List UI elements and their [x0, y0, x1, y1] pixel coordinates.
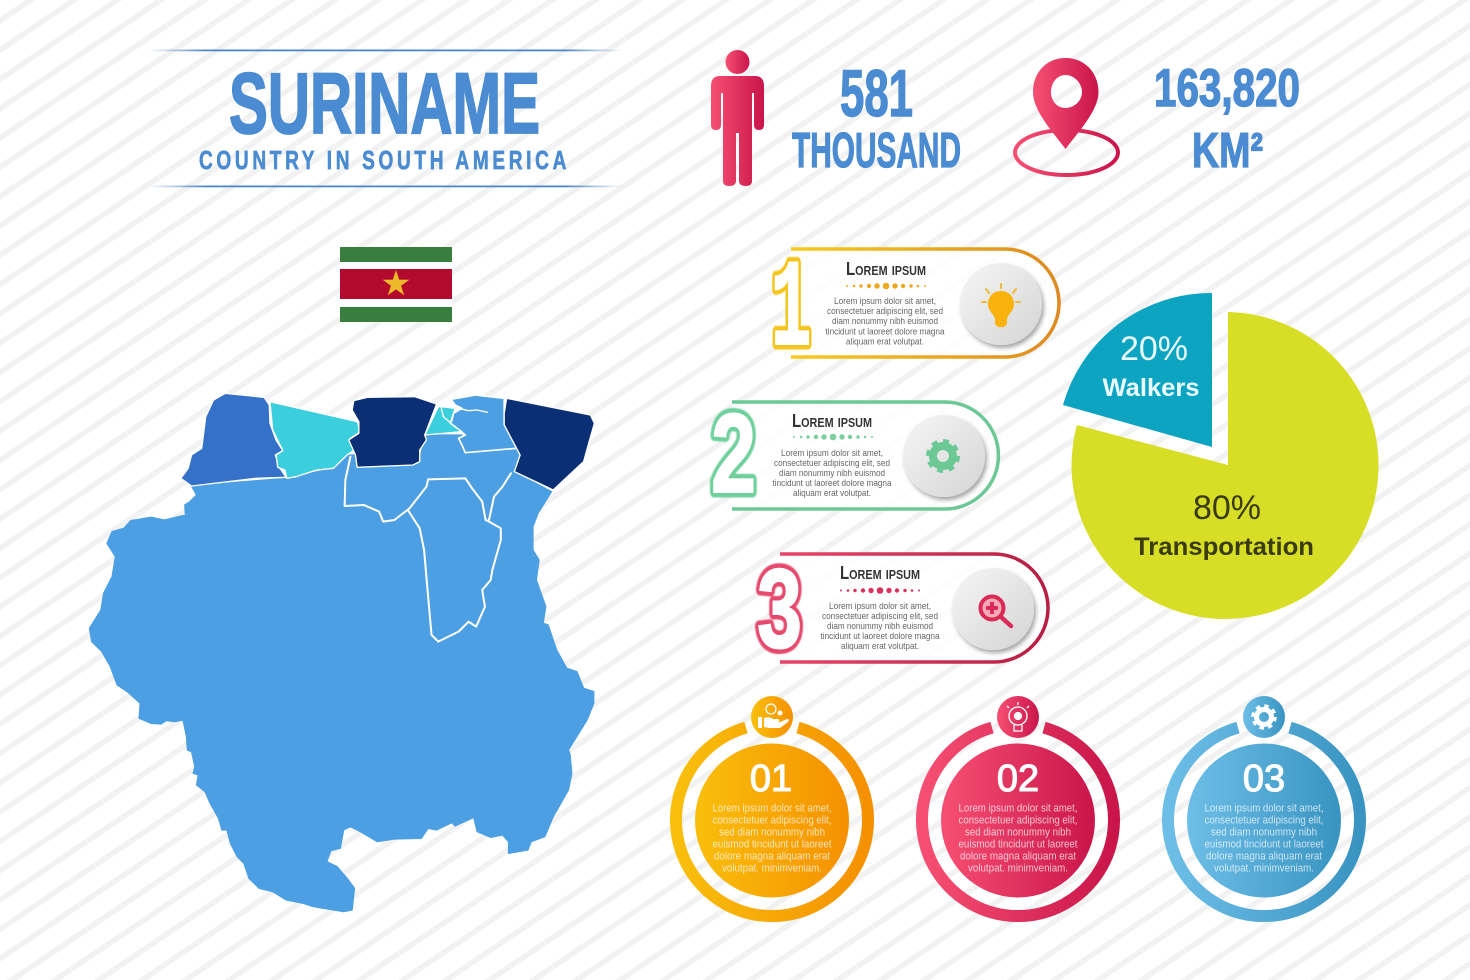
number: 02 — [997, 758, 1039, 800]
paragraph: Lorem ipsum dolor sit amet, — [712, 802, 832, 814]
paragraph: diam nonummy nibh euismod — [832, 316, 938, 326]
paragraph: diam nonummy nibh euismod — [827, 621, 933, 631]
paragraph — [1204, 802, 1324, 874]
map: river channel — [459, 408, 487, 412]
paragraph: tincidunt ut laoreet dolore magna — [820, 631, 940, 641]
paragraph: aliquam erat volutpat. — [841, 641, 919, 651]
pie chart — [1063, 293, 1379, 619]
numeral 2: 2 — [711, 391, 756, 516]
map of Suriname — [89, 393, 594, 912]
label: 80%: 80% — [1193, 489, 1261, 527]
paragraph: consectetuer adipiscing elit, — [958, 814, 1078, 826]
paragraph: dolore magna aliquam erat — [714, 850, 830, 862]
paragraph: aliquam erat volutpat. — [846, 336, 924, 346]
dots — [840, 587, 920, 594]
paragraph: Lorem ipsum dolor sit amet, — [834, 296, 936, 306]
icon: hand with gears — [758, 704, 789, 728]
inner disc — [695, 744, 849, 898]
paragraph: Lorem ipsum dolor sit amet, — [958, 802, 1078, 814]
number: 01 — [750, 758, 792, 800]
label: 20%: 20% — [1120, 330, 1188, 368]
slice: transportation 80% — [1072, 312, 1379, 619]
paragraph: consectetuer adipiscing elit, sed — [822, 611, 938, 621]
population unit: THOUSAND — [792, 124, 961, 178]
paragraph: euismod tincidunt ut laoreet — [958, 838, 1078, 850]
badge — [751, 696, 793, 738]
map: main body — [89, 435, 594, 912]
title block — [148, 50, 623, 187]
paragraph: consectetuer adipiscing elit, sed — [827, 306, 943, 316]
numeral 3: 3 — [757, 546, 802, 671]
paragraph — [820, 601, 940, 651]
paragraph — [712, 802, 832, 874]
paragraph: dolore magna aliquam erat — [1206, 850, 1322, 862]
paragraph: Lorem ipsum dolor sit amet, — [781, 448, 883, 458]
subtitle: COUNTRY IN SOUTH AMERICA — [199, 145, 570, 175]
paragraph — [958, 802, 1078, 874]
paragraph: tincidunt ut laoreet dolore magna — [826, 326, 944, 336]
paragraph: Lorem ipsum dolor sit amet, — [1204, 802, 1324, 814]
map: Nickerie district — [181, 393, 286, 486]
paragraph: sed diam nonummy nibh — [1211, 826, 1317, 838]
inner disc — [941, 744, 1095, 898]
paragraph — [772, 448, 892, 498]
paragraph — [826, 296, 944, 346]
area stat — [1015, 58, 1300, 178]
population stat — [711, 50, 961, 186]
numeral 2: 2 — [711, 391, 756, 516]
numeral 3: 3 — [757, 546, 802, 671]
icon: gear — [1253, 706, 1275, 728]
map: Commewijne district — [451, 395, 517, 453]
map: Saramacca district — [349, 397, 437, 467]
icon: gear — [928, 442, 958, 470]
panel: circle 01 — [676, 696, 868, 916]
heading: Lorem ipsum — [840, 563, 920, 583]
icon: flag of Suriname — [340, 247, 452, 322]
paragraph: consectetuer adipiscing elit, — [712, 814, 832, 826]
map: Wanica district — [425, 407, 462, 435]
map: inner district borders — [345, 457, 511, 642]
panel: step 3 — [757, 546, 1048, 671]
ring — [1168, 728, 1360, 916]
panel: circle 02 — [922, 696, 1114, 916]
area number: 163,820 — [1154, 59, 1300, 118]
panel: circle 03 — [1168, 696, 1360, 916]
label: Transportation: Transportation — [1134, 533, 1314, 561]
paragraph: sed diam nonummy nibh — [965, 826, 1071, 838]
ring — [922, 728, 1114, 916]
heading: Lorem ipsum — [846, 259, 926, 279]
dots — [793, 434, 873, 440]
paragraph: Lorem ipsum dolor sit amet, — [829, 601, 931, 611]
heading: Lorem ipsum — [792, 411, 872, 431]
icon: magnifier — [980, 596, 1011, 626]
paragraph: aliquam erat volutpat. — [793, 488, 871, 498]
number: 03 — [1243, 758, 1285, 800]
paragraph: diam nonummy nibh euismod — [779, 468, 885, 478]
inner disc — [1187, 744, 1341, 898]
paragraph: volutpat. minimveniam. — [1214, 862, 1314, 874]
paragraph: sed diam nonummy nibh — [719, 826, 825, 838]
badge — [1243, 696, 1285, 738]
numeral 1: 1 — [771, 241, 811, 381]
paragraph: tincidunt ut laoreet dolore magna — [772, 478, 892, 488]
icon disc — [903, 415, 985, 497]
badge — [997, 696, 1039, 738]
dots — [846, 283, 926, 289]
population number: 581 — [840, 56, 913, 130]
paragraph: volutpat. minimveniam. — [722, 862, 822, 874]
map: Coronie district — [270, 402, 361, 478]
paragraph: consectetuer adipiscing elit, sed — [774, 458, 890, 468]
icon disc — [952, 568, 1034, 650]
paragraph: euismod tincidunt ut laoreet — [1204, 838, 1324, 850]
paragraph: dolore magna aliquam erat — [960, 850, 1076, 862]
pill outline — [780, 554, 1048, 662]
area unit: KM² — [1192, 124, 1263, 178]
pill outline — [791, 249, 1059, 357]
icon: person — [711, 50, 764, 186]
icon disc — [960, 263, 1042, 345]
slice: walkers 20% — [1063, 293, 1212, 447]
label: Walkers: Walkers — [1102, 374, 1200, 402]
title: SURINAME — [229, 56, 540, 152]
paragraph: euismod tincidunt ut laoreet — [712, 838, 832, 850]
pill outline — [732, 402, 998, 509]
paragraph: volutpat. minimveniam. — [968, 862, 1068, 874]
icon: light bulb — [982, 284, 1020, 327]
panel: step 1 — [771, 241, 1059, 381]
map: Marowijne district — [504, 398, 594, 490]
icon: map pin — [1015, 58, 1118, 175]
panel: step 2 — [711, 391, 998, 516]
ring — [676, 728, 868, 916]
numeral 1: 1 — [771, 241, 811, 381]
icon: bulb with gear — [1007, 702, 1029, 731]
paragraph: consectetuer adipiscing elit, — [1204, 814, 1324, 826]
